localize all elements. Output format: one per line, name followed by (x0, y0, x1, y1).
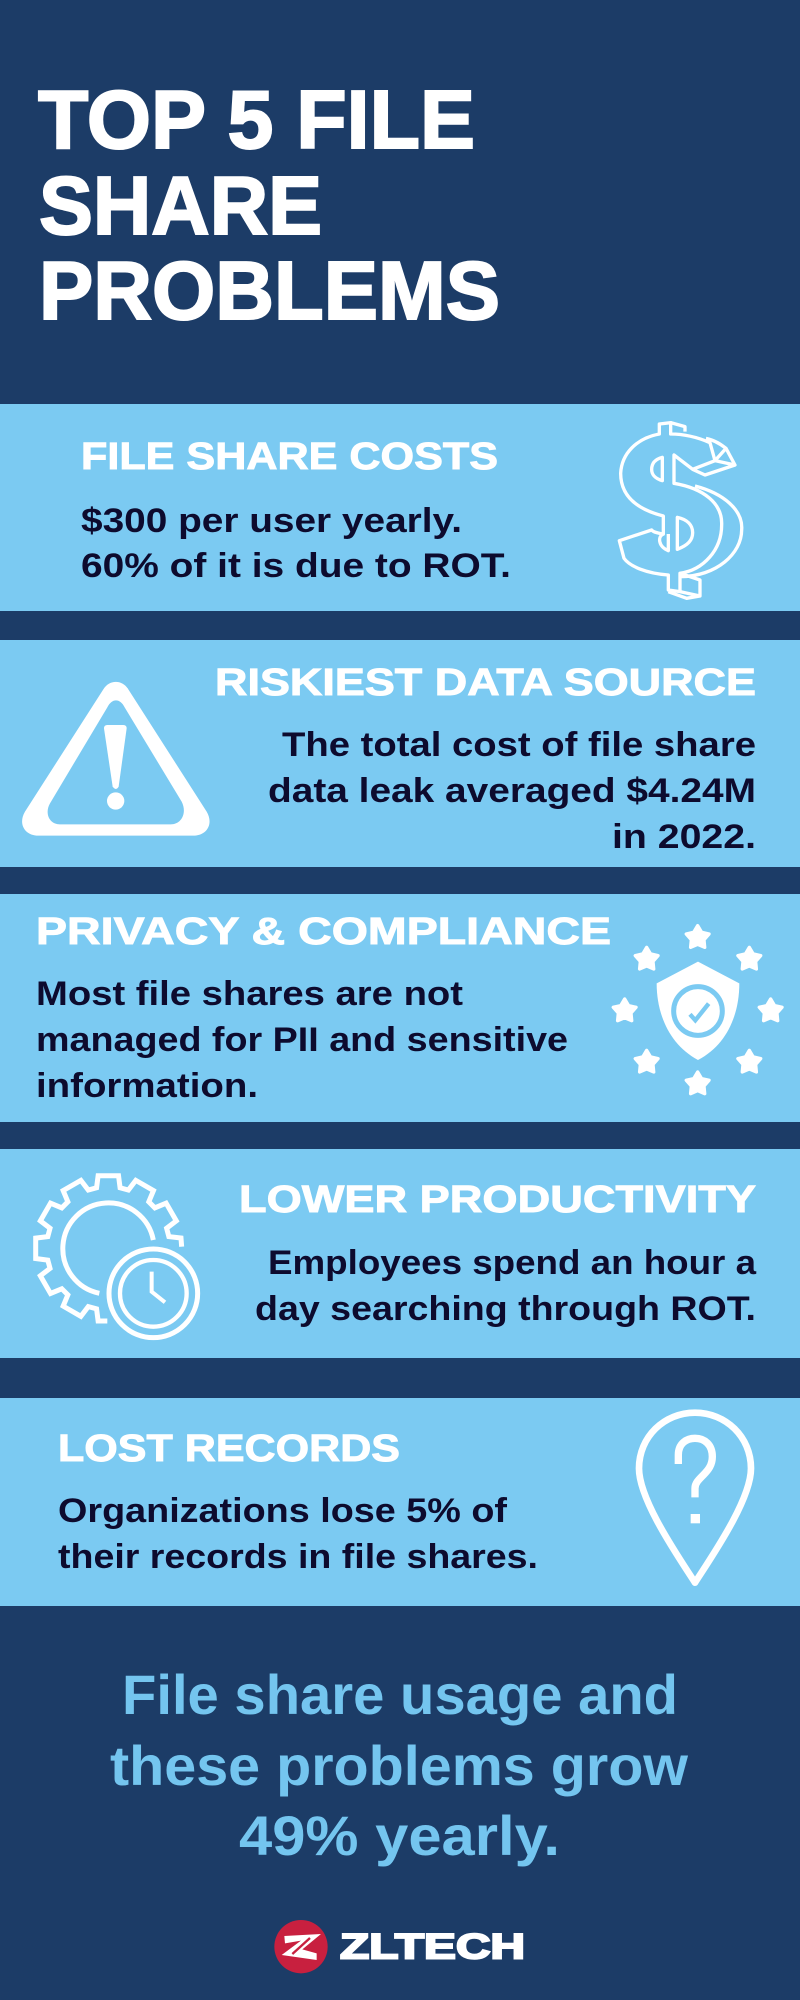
body text: costs: $300 per user yearly. (81, 502, 462, 540)
body text: privacy: managed for PII and sensitive (36, 1021, 568, 1059)
body text: lost records: Organizations lose 5% of (58, 1492, 508, 1530)
icon: dollar sign (619, 423, 742, 598)
closing statement: File share usage and (122, 1663, 678, 1726)
body text: lost records: their records in file shares. (58, 1538, 538, 1576)
heading: riskiest data source: RISKIEST DATA SOURCE (215, 662, 756, 704)
heading: privacy and compliance: PRIVACY & COMPLIANCE (36, 911, 611, 953)
body text: riskiest (268, 726, 756, 856)
panel: lost records (0, 1398, 800, 1606)
body text: productivity: day searching through ROT. (255, 1290, 756, 1328)
logo wordmark: ZLTECH (340, 1928, 525, 1966)
icon: gear and clock (36, 1176, 198, 1338)
logo: ZL Tech (274, 1920, 525, 1973)
panel: lower productivity (0, 1149, 800, 1358)
icon: shield with stars (613, 926, 782, 1094)
logo mark (274, 1920, 328, 1973)
body text: privacy: information. (36, 1067, 258, 1105)
body text: riskiest: in 2022. (612, 818, 756, 856)
body text: lost records (58, 1492, 538, 1576)
title: TOP 5 FILE (38, 73, 475, 166)
body text: riskiest: data leak averaged $4.24M (268, 772, 756, 810)
title: SHARE (39, 159, 322, 252)
title: PROBLEMS (39, 244, 500, 337)
icon: warning triangle (22, 682, 210, 836)
heading: file share costs: FILE SHARE COSTS (81, 436, 498, 478)
panel: privacy and compliance (0, 894, 800, 1122)
panel: riskiest data source (0, 640, 800, 867)
body text: costs: 60% of it is due to ROT. (81, 547, 511, 585)
heading: lost records: LOST RECORDS (58, 1428, 400, 1470)
body text: productivity (255, 1244, 757, 1328)
closing statement: these problems grow (110, 1734, 688, 1797)
title (38, 73, 500, 337)
body text: privacy: Most file shares are not (36, 975, 463, 1013)
closing statement (110, 1663, 688, 1867)
body text: productivity: Employees spend an hour a (268, 1244, 757, 1282)
closing statement: 49% yearly. (239, 1804, 560, 1867)
body text: riskiest: The total cost of file share (282, 726, 756, 764)
panel: file share costs (0, 404, 800, 611)
heading: lower productivity: LOWER PRODUCTIVITY (239, 1179, 756, 1221)
body text: costs (81, 502, 511, 585)
icon: map pin with question mark (639, 1413, 751, 1583)
body text: privacy (36, 975, 568, 1105)
